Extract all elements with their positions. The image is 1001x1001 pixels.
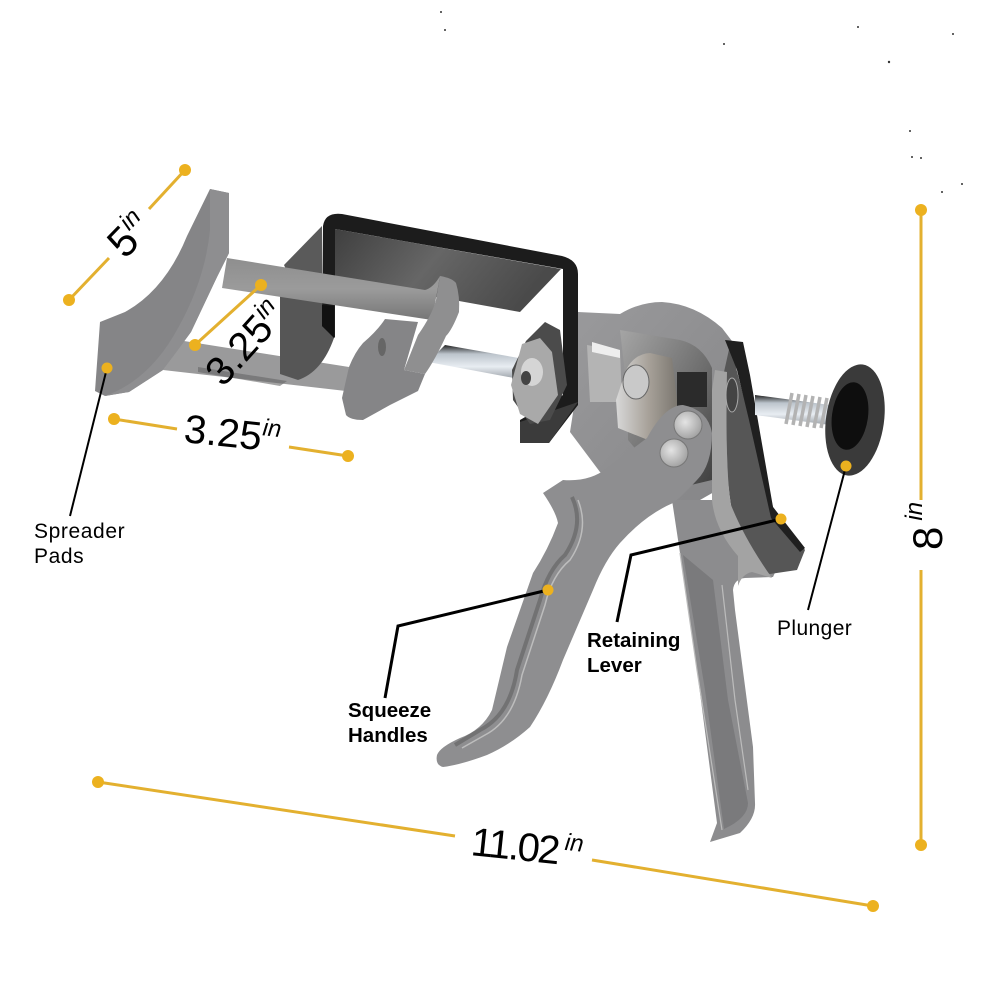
dimension: 8 in: 8: [904, 527, 951, 550]
dimension: 3.25 in horizontal: 3.25: [182, 407, 264, 459]
dimension: 5 in: in: [114, 203, 146, 236]
label: Squeeze Handles: Handles: [348, 724, 428, 747]
label: Plunger: Plunger: [777, 617, 852, 640]
hex nut: [512, 322, 567, 424]
dimension: 8 in: in: [901, 502, 928, 521]
squeeze handle: [437, 405, 712, 767]
dimension lines: [69, 170, 921, 906]
dimension: 3.25 in diagonal: 3.25: [197, 307, 282, 394]
label: Retaining Lever: Retaining: [587, 629, 680, 652]
inner plate: [620, 330, 712, 490]
leader lines: [70, 368, 846, 698]
spreader pad: [95, 189, 229, 396]
push rod: [428, 345, 530, 381]
bolts: [674, 411, 702, 439]
specks: [440, 11, 963, 193]
label: Retaining Lever: Lever: [587, 654, 642, 677]
plunger rod and spring: [755, 395, 845, 427]
yellow dots: [63, 164, 927, 912]
clamp body: [342, 319, 425, 420]
dimension: 3.25 in diagonal: in: [248, 292, 281, 324]
tool illustration: [95, 189, 892, 842]
lower lever plate: [724, 345, 805, 574]
label: Spreader Pads: Pads: [34, 545, 84, 568]
dimension: 3.25 in horizontal: in: [261, 414, 283, 443]
label: Squeeze Handles: Squeeze: [348, 699, 431, 722]
label: Spreader Pads: Spreader: [34, 520, 125, 543]
silver nut: [616, 353, 680, 440]
dimension: 11.02 in: in: [564, 829, 585, 858]
dimension: 5 in: 5: [98, 217, 148, 266]
spreader rear arm: [163, 341, 349, 391]
rear handle: [672, 500, 790, 842]
top bar: [222, 258, 440, 320]
bracket inner plate: [335, 229, 561, 312]
bracket side plates: [284, 226, 322, 300]
dimension: 11.02 in: 11.02: [469, 820, 561, 873]
black bracket: [322, 214, 578, 443]
plunger disc: [818, 361, 892, 479]
main body: [570, 302, 738, 500]
clamp flange: [404, 276, 459, 374]
retaining lever black strip: [725, 340, 805, 552]
